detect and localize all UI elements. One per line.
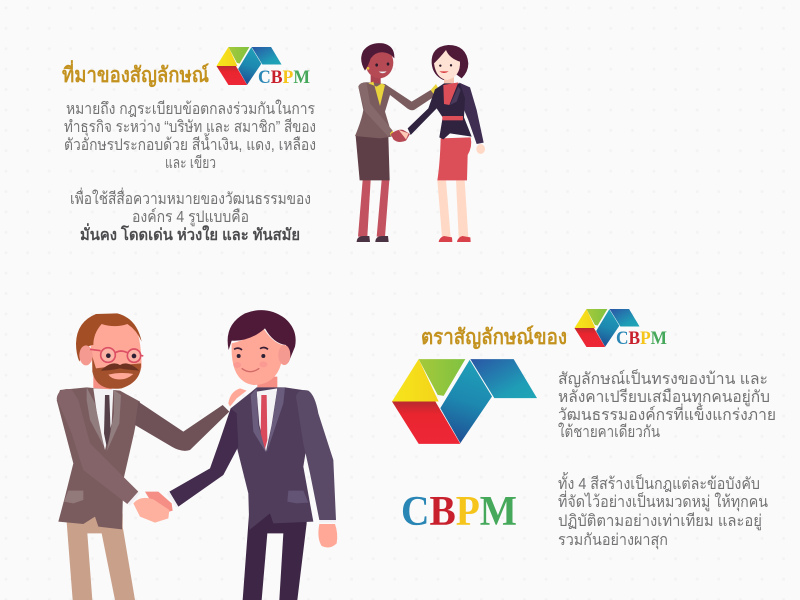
text block: meaning of the logo: ตัวอักษรประกอบด้วย สีน้ำเงิน, แดง, เหลือง [64, 133, 316, 154]
text block: colors description: รวมกันอย่างผาสุก [558, 532, 668, 550]
illustration: two men shaking hands [57, 310, 337, 600]
text block: meaning of the logo: องค์กร 4 รูปแบบคือ [132, 207, 249, 227]
text block: meaning of the logo [64, 99, 316, 244]
text block: meaning of the logo: หมายถึง กฎระเบียบข้อตกลงร่วมกันในการ [66, 99, 315, 118]
text block: meaning of the logo: มั่นคง โดดเด่น ห่วงใย และ ทันสมัย [80, 223, 300, 244]
right woman [408, 45, 485, 242]
text block: emblem description: หลังคาเปรียบเสมือนทุกคนอยู่กับ [558, 388, 770, 407]
icon: small CBPM logo right: CBPM [616, 328, 667, 349]
handshake [133, 492, 178, 523]
text block: colors description: ที่จัดไว้อย่างเป็นหมวดหมู่ ให้ทุกคน [558, 490, 768, 512]
text block: meaning of the logo: และ เขียว [165, 154, 216, 172]
icon: small CBPM logo top [216, 47, 310, 88]
illustration: two women shaking hands [355, 43, 485, 242]
text block: emblem description: ใต้ชายคาเดียวกัน [558, 422, 660, 441]
heading: the CBPM emblem: ตราสัญลักษณ์ของ [421, 325, 567, 350]
text block: meaning of the logo: ทำธุรกิจ ระหว่าง “บริษัท และ สมาชิก” สีของ [64, 118, 316, 137]
handshake [391, 130, 410, 142]
text block: emblem description [558, 368, 776, 441]
text block: colors description: ทั้ง 4 สีสร้างเป็นกฎแต่ละข้อบังคับ [558, 472, 760, 493]
left woman [355, 43, 438, 242]
right man [169, 310, 337, 600]
text block: colors description: ปฏิบัติตามอย่างเท่าเทียม และอยู่ [558, 512, 762, 531]
left man [57, 313, 247, 600]
icon: large CBPM emblem [392, 359, 537, 444]
text block: emblem description: วัฒนธรรมองค์กรที่แข็งแกร่งภาย [558, 403, 776, 424]
text block: colors description [558, 472, 768, 550]
text block: meaning of the logo: เพื่อใช้สีสื่อความหมายของวัฒนธรรมของ [70, 187, 311, 208]
wordmark: CBPM: CBPM [401, 489, 517, 535]
heading: origin of the logo: ที่มาของสัญลักษณ์ [62, 59, 209, 88]
text block: emblem description: สัญลักษณ์เป็นทรงของบ้าน และ [558, 368, 768, 388]
icon: small CBPM logo right [574, 309, 667, 349]
icon: small CBPM logo top: CBPM [258, 67, 310, 88]
